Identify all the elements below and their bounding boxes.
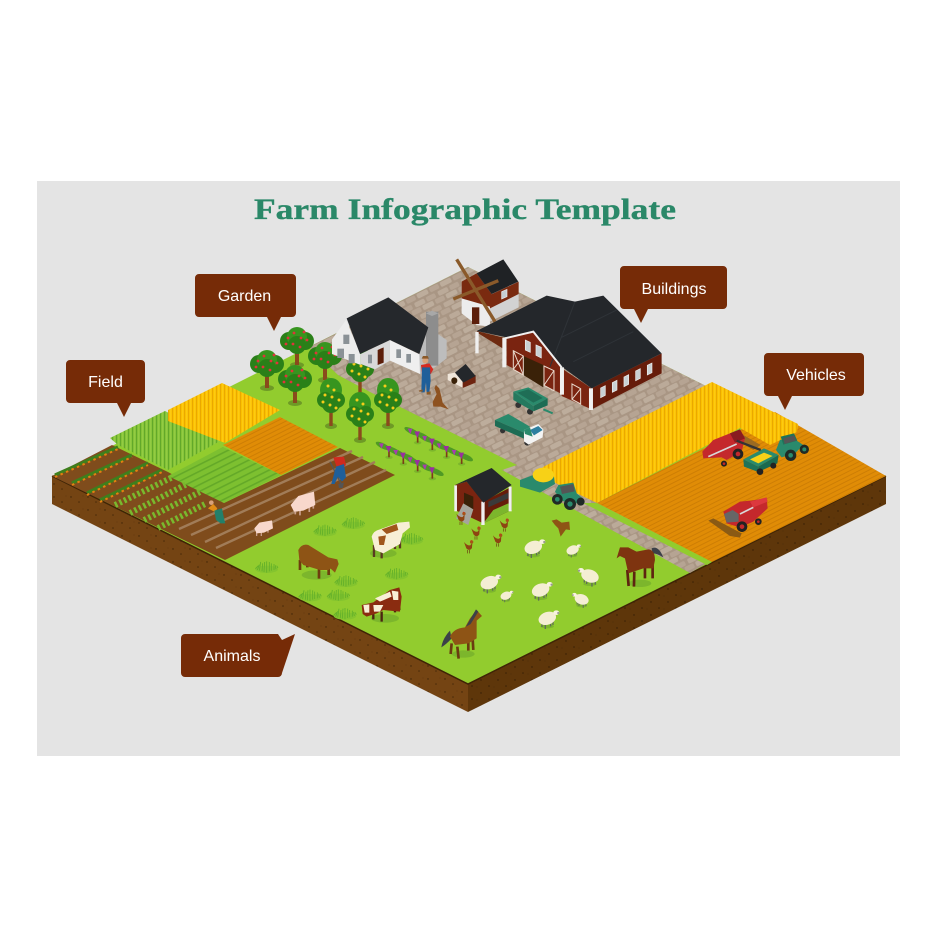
apple tree [308,342,342,383]
panel: orchard trees [250,327,402,443]
apple tree [250,350,284,391]
callout: Vehicles [764,353,864,410]
barn [475,296,662,410]
sheep flock [479,538,601,629]
field: big orange [597,412,886,562]
panel: animals [255,468,663,659]
panel: crop fields [52,382,886,565]
paved yard and road [309,267,712,573]
apple tree [278,365,312,406]
callout: Garden [195,274,296,331]
pig small [254,520,273,536]
red spotted cow [362,587,402,623]
grape vines [375,425,474,480]
panel: vehicles [520,429,809,538]
dog house [448,364,476,388]
pear tree [346,392,374,443]
callout: Field [66,360,145,417]
grass tufts [255,517,423,620]
callout: Animals [181,634,295,677]
hen house [454,468,512,525]
soil side: left [52,476,468,712]
hens [456,512,509,553]
background panel [37,181,900,756]
combine harvester lower [708,497,768,538]
panel: field workers and pigs [208,457,346,536]
farmhouse [332,297,447,374]
big wheat block [543,382,798,503]
farm ground block [52,267,886,712]
soil side: right [468,476,886,712]
flatbed truck [495,414,543,446]
combine harvester upper [702,429,761,467]
carrot rows [55,447,162,502]
panel: buildings and yard [332,259,662,480]
pear tree [317,378,345,429]
green trailer [513,387,553,415]
brown cow [298,545,339,580]
field: soil [52,445,395,560]
callout: Garden: Garden [218,288,271,305]
green wheat block [110,411,222,470]
callout: Buildings [620,266,727,323]
callout: Animals: Animals [204,648,260,665]
spotted cow [370,522,410,558]
apple tree [280,327,314,368]
farmer with hoe [330,457,346,488]
windmill [453,259,519,327]
grass surface [52,267,886,684]
callout: Vehicles: Vehicles [786,367,846,384]
pear tree [374,378,402,429]
kneeling farmer [208,500,225,523]
yellow wheat block [168,383,280,443]
farmer [419,356,433,395]
callout: Buildings: Buildings [642,281,706,298]
road grain trailer [520,468,555,493]
dog [433,385,449,409]
maroon horse [617,547,663,587]
seedling rows [115,477,207,528]
harvested strip tractor [776,433,809,461]
grain trailer [743,448,779,475]
pig large [291,492,315,515]
title: Farm Infographic Template [254,193,676,226]
callout: Field: Field [88,374,123,391]
pear tree [346,347,374,398]
soil edge [52,476,886,684]
small brown dog [552,519,570,537]
road tractor [552,483,585,510]
brown horse [441,609,482,659]
field: light green [168,447,281,503]
furrows [179,451,386,548]
green verge [583,503,712,565]
field: orange stubble [223,417,338,475]
